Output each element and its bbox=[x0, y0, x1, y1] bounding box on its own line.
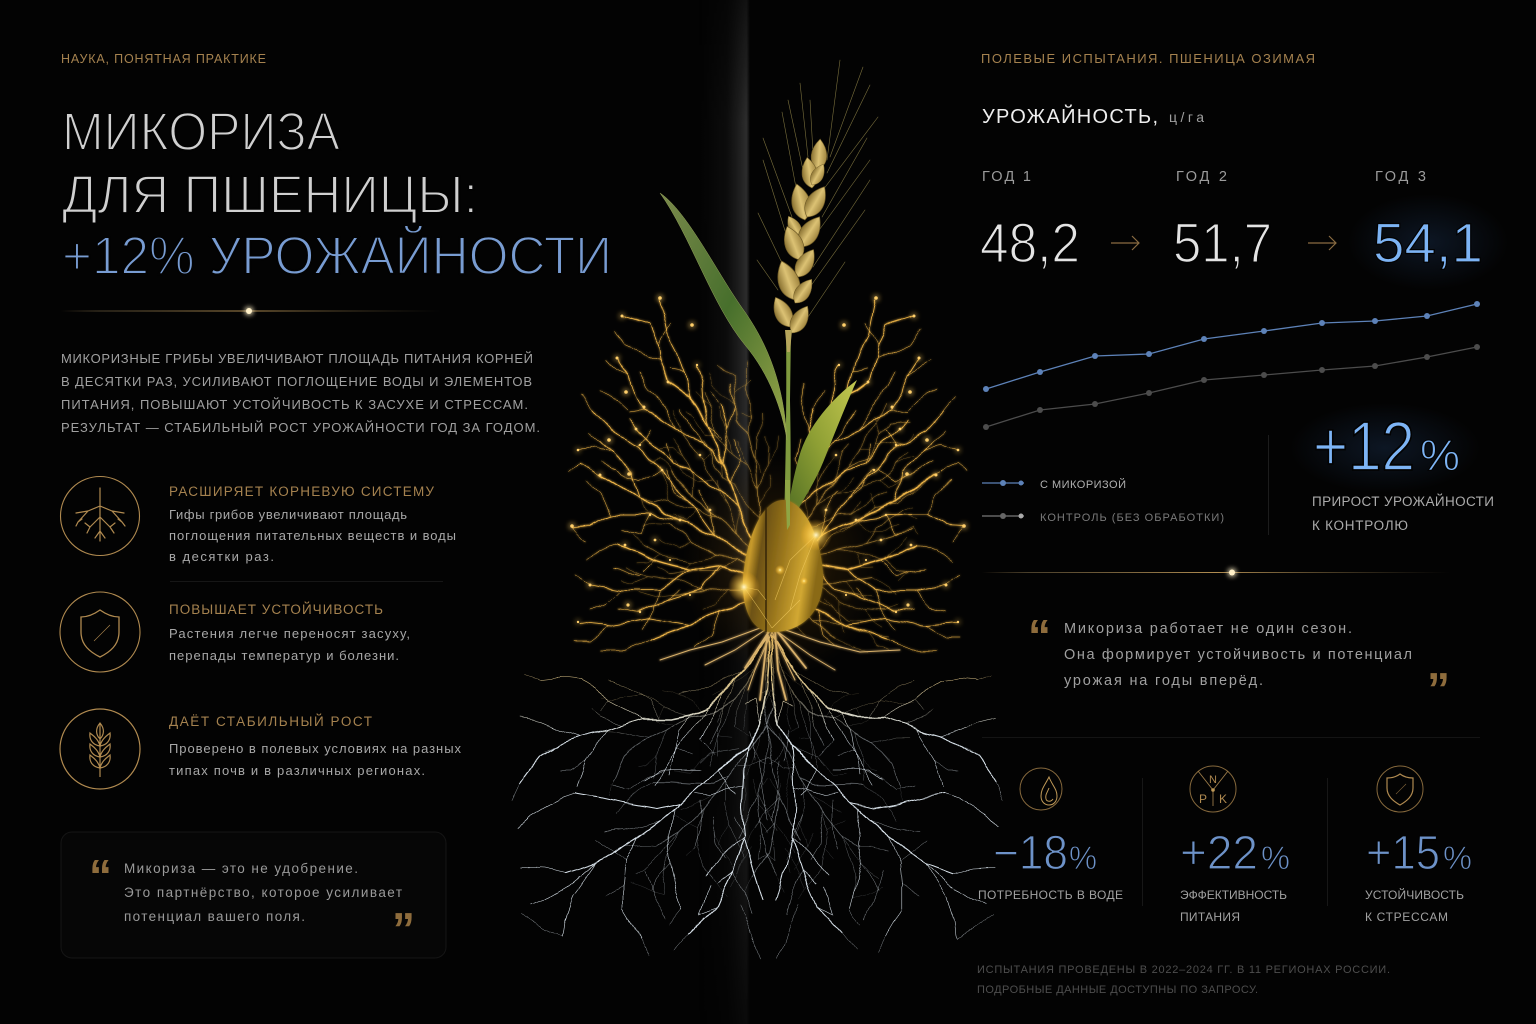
icon: shield bbox=[1377, 766, 1423, 812]
divider with glowing dot bbox=[982, 570, 1450, 576]
benefit 1: root system bbox=[60, 476, 456, 564]
quote text: Микориза — это не удобрение. bbox=[124, 861, 358, 876]
title: +12% УРОЖАЙНОСТИ bbox=[62, 225, 612, 286]
line chart bbox=[983, 301, 1480, 430]
illustration: wheat plant with mycorrhiza bbox=[512, 60, 1002, 960]
footnote: ПОДРОБНЫЕ ДАННЫЕ ДОСТУПНЫ ПО ЗАПРОСУ. bbox=[977, 984, 1258, 996]
value: −18 bbox=[993, 827, 1068, 880]
big metric +12% bbox=[1290, 403, 1494, 533]
hyphae glowing tips bbox=[570, 296, 966, 623]
label bbox=[1365, 887, 1464, 924]
root system bbox=[512, 636, 1002, 960]
series: with mycorrhiza bbox=[983, 301, 1480, 392]
benefit 2: resilience bbox=[60, 592, 410, 672]
quote text: урожая на годы вперёд. bbox=[1064, 673, 1263, 689]
center spine band bbox=[726, 0, 750, 999]
big metric +12%: +12 bbox=[1313, 407, 1415, 485]
quote text: Это партнёрство, которое усиливает bbox=[124, 885, 402, 900]
description: перепады температур и болезни. bbox=[169, 648, 399, 663]
description: типах почв и в различных регионах. bbox=[169, 763, 425, 778]
stat: nutrition bbox=[1180, 766, 1290, 924]
closing quote mark: ” bbox=[1427, 663, 1450, 715]
value: +15 bbox=[1366, 827, 1440, 880]
year labels bbox=[982, 169, 1426, 185]
quote text: Она формирует устойчивость и потенциал bbox=[1064, 647, 1412, 663]
intro paragraph: МИКОРИЗНЫЕ ГРИБЫ УВЕЛИЧИВАЮТ ПЛОЩАДЬ ПИТАНИЯ КОРНЕЙ bbox=[61, 351, 533, 366]
label: ПОТРЕБНОСТЬ В ВОДЕ bbox=[978, 888, 1123, 902]
icon: NPK: P bbox=[1199, 792, 1207, 806]
intro paragraph: В ДЕСЯТКИ РАЗ, УСИЛИВАЮТ ПОГЛОЩЕНИЕ ВОДЫ И ЭЛЕМЕНТОВ bbox=[61, 374, 532, 389]
title: МИКОРИЗА bbox=[62, 102, 340, 162]
seed glow bbox=[682, 455, 882, 675]
label: УСТОЙЧИВОСТЬ bbox=[1365, 887, 1464, 902]
legend: КОНТРОЛЬ (БЕЗ ОБРАБОТКИ) bbox=[1040, 512, 1224, 524]
wheat ear bbox=[768, 139, 832, 352]
footnote bbox=[977, 964, 1390, 996]
icon: NPK bbox=[1190, 766, 1236, 812]
quote card bbox=[61, 832, 446, 958]
year labels: ГОД 3 bbox=[1375, 169, 1426, 185]
quote text bbox=[124, 861, 402, 924]
icon: NPK: N bbox=[1209, 774, 1217, 786]
seed bbox=[728, 500, 832, 632]
legend: С МИКОРИЗОЙ bbox=[1040, 478, 1126, 491]
icon: NPK: K bbox=[1219, 792, 1227, 806]
intro paragraph bbox=[61, 351, 540, 435]
title bbox=[62, 102, 612, 286]
stat: stress bbox=[1365, 766, 1472, 924]
icon: water drop bbox=[1020, 768, 1062, 810]
value: % bbox=[1443, 840, 1472, 876]
mycorrhiza network, gold bbox=[570, 298, 966, 658]
panel: left column bbox=[60, 52, 612, 958]
stat: water bbox=[978, 768, 1123, 902]
description bbox=[169, 626, 410, 663]
yield values: 51,7 bbox=[1173, 211, 1272, 274]
stem base over seed bbox=[785, 480, 790, 530]
value: +22 bbox=[1180, 827, 1258, 880]
label: ПИТАНИЯ bbox=[1180, 910, 1240, 924]
label: К СТРЕССАМ bbox=[1365, 910, 1448, 924]
yield values: 48,2 bbox=[980, 211, 1080, 274]
root crown bbox=[660, 628, 900, 700]
description: в десятки раз. bbox=[169, 549, 274, 564]
title: ДЛЯ ПШЕНИЦЫ: bbox=[62, 165, 478, 225]
big metric +12%: % bbox=[1420, 431, 1460, 480]
heading: ПОВЫШАЕТ УСТОЙЧИВОСТЬ bbox=[169, 602, 383, 617]
yield values: 54,1 bbox=[1373, 211, 1483, 274]
heading: РАСШИРЯЕТ КОРНЕВУЮ СИСТЕМУ bbox=[169, 484, 434, 499]
benefit 3: stable growth bbox=[60, 709, 462, 789]
legend bbox=[982, 478, 1224, 524]
value: % bbox=[1069, 840, 1097, 876]
metric caption: ПРИРОСТ УРОЖАЙНОСТИ bbox=[1312, 494, 1494, 509]
quote bbox=[1028, 610, 1450, 715]
quote text: Микориза работает не один сезон. bbox=[1064, 621, 1352, 637]
description: Проверено в полевых условиях на разных bbox=[169, 741, 462, 756]
label: ЭФФЕКТИВНОСТЬ bbox=[1180, 888, 1287, 902]
quote text: потенциал вашего поля. bbox=[124, 909, 305, 924]
stem bbox=[784, 330, 791, 530]
description: поглощения питательных веществ и воды bbox=[169, 528, 456, 543]
metric caption bbox=[1312, 494, 1494, 533]
eyebrow: ПОЛЕВЫЕ ИСПЫТАНИЯ. ПШЕНИЦА ОЗИМАЯ bbox=[981, 51, 1315, 66]
left leaf bbox=[660, 193, 787, 440]
intro paragraph: ПИТАНИЯ, ПОВЫШАЮТ УСТОЙЧИВОСТЬ К ЗАСУХЕ И СТРЕССАМ. bbox=[61, 397, 528, 412]
yield heading: ц/га bbox=[1169, 109, 1204, 125]
metric caption: К КОНТРОЛЮ bbox=[1312, 518, 1408, 533]
icon: shield bbox=[60, 592, 140, 672]
series: control bbox=[983, 344, 1480, 430]
icon: roots bbox=[60, 476, 140, 556]
eyebrow: НАУКА, ПОНЯТНАЯ ПРАКТИКЕ bbox=[61, 52, 266, 66]
description: Растения легче переносят засуху, bbox=[169, 626, 410, 641]
value: % bbox=[1261, 840, 1290, 876]
icon: wheat bbox=[60, 709, 140, 789]
footnote: ИСПЫТАНИЯ ПРОВЕДЕНЫ В 2022–2024 ГГ. В 11 РЕГИОНАХ РОССИИ. bbox=[977, 964, 1390, 976]
panel: right column bbox=[977, 51, 1508, 996]
closing quote mark: ” bbox=[392, 903, 415, 955]
heading: ДАЁТ СТАБИЛЬНЫЙ РОСТ bbox=[169, 714, 372, 729]
year labels: ГОД 2 bbox=[1176, 169, 1227, 185]
yield heading: УРОЖАЙНОСТЬ, bbox=[982, 104, 1158, 128]
description bbox=[169, 507, 456, 564]
quote text bbox=[1064, 621, 1412, 689]
right leaf bbox=[787, 380, 857, 528]
year labels: ГОД 1 bbox=[982, 169, 1031, 185]
wheat awns bbox=[757, 60, 878, 317]
opening quote mark: “ bbox=[1028, 610, 1051, 662]
opening quote mark: “ bbox=[89, 850, 112, 902]
description bbox=[169, 741, 462, 778]
divider with glowing dot bbox=[61, 308, 441, 314]
label bbox=[1180, 888, 1287, 924]
arrows bbox=[1111, 236, 1336, 250]
yield values bbox=[980, 194, 1508, 290]
description: Гифы грибов увеличивают площадь bbox=[169, 507, 407, 522]
intro paragraph: РЕЗУЛЬТАТ — СТАБИЛЬНЫЙ РОСТ УРОЖАЙНОСТИ ГОД ЗА ГОДОМ. bbox=[61, 420, 540, 435]
